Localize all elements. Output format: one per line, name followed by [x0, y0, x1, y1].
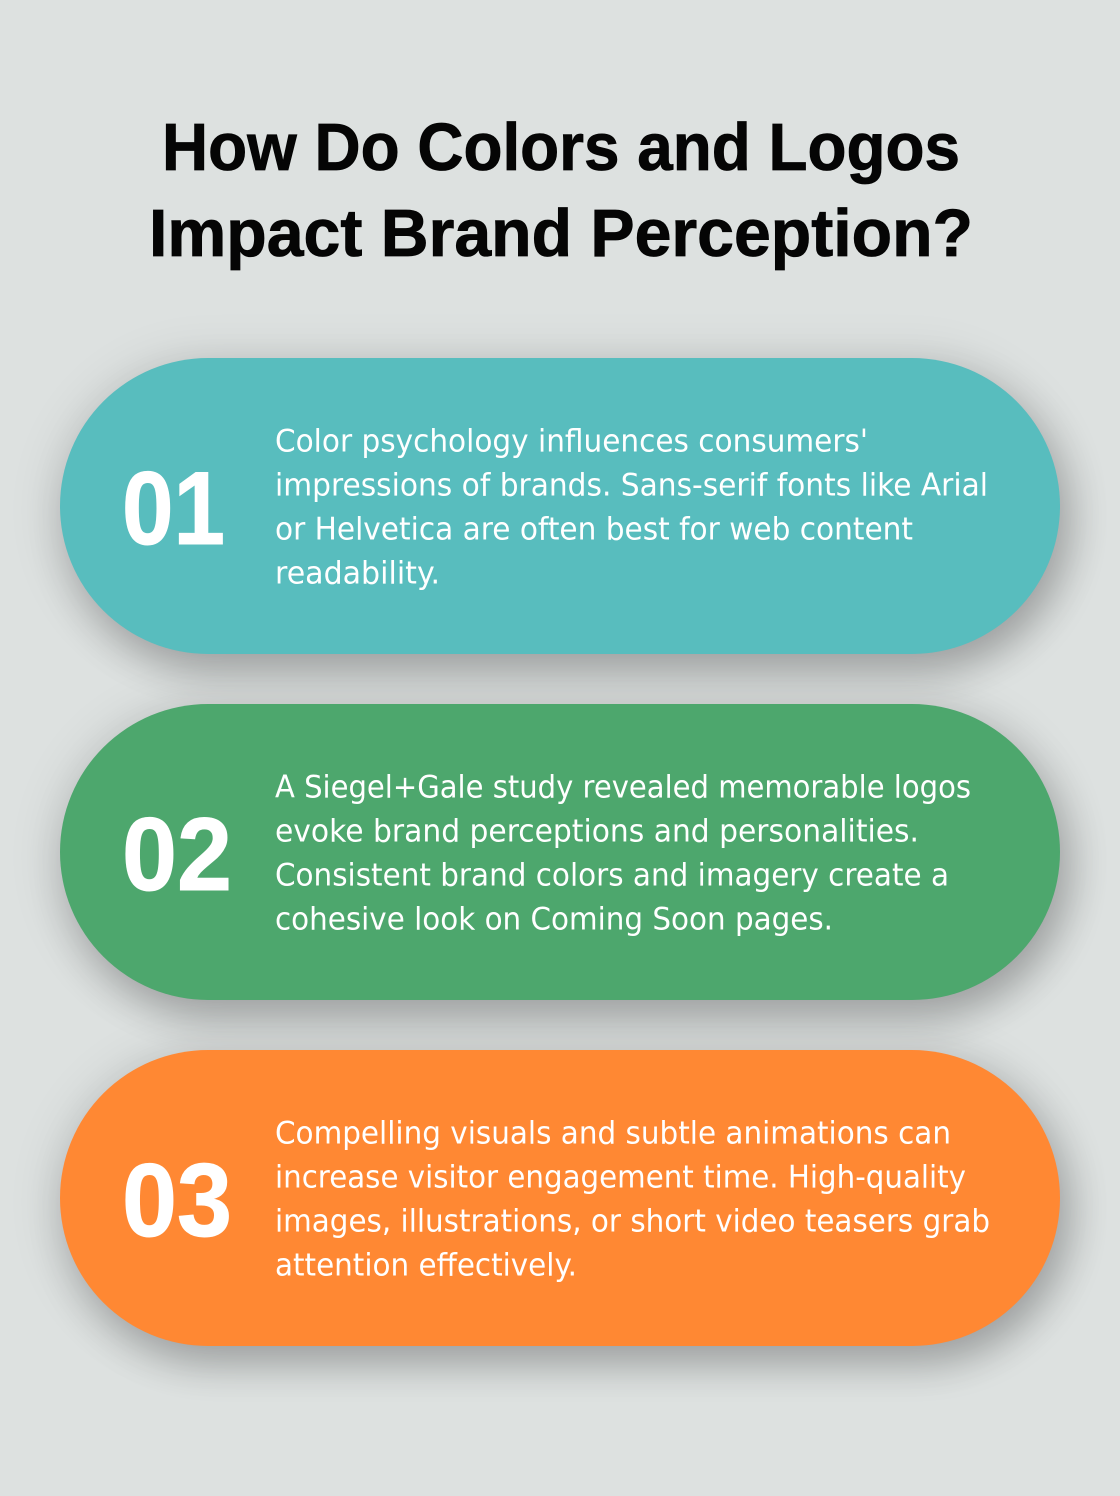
text: step 02: A Siegel+Gale study revealed memorable logos: [275, 770, 971, 806]
title: [149, 110, 973, 271]
title: Impact Brand Perception?: [149, 196, 973, 271]
text: step 02: evoke brand perceptions and personalities.: [275, 814, 919, 850]
text: step 03: attention effectively.: [275, 1248, 577, 1284]
panel: step 02: [34, 682, 1086, 1030]
text: step 01: readability.: [275, 556, 440, 592]
text: step 01: Color psychology influences consumers': [275, 424, 868, 460]
text: step 02: [275, 770, 971, 938]
text: step 01: [275, 424, 988, 592]
number 02: 02: [122, 797, 232, 913]
panel: step 03: [34, 1028, 1086, 1376]
text: step 03: Compelling visuals and subtle animations can: [275, 1116, 951, 1152]
text: step 03: [275, 1116, 990, 1284]
text: step 02: Consistent brand colors and imagery create a: [275, 858, 949, 894]
text: step 01: impressions of brands. Sans-serif fonts like Arial: [275, 468, 988, 504]
text: step 03: increase visitor engagement time. High-quality: [275, 1160, 966, 1196]
title: How Do Colors and Logos: [162, 110, 960, 185]
text: step 03: images, illustrations, or short video teasers grab: [275, 1204, 990, 1240]
panel: step 01: [34, 336, 1086, 684]
text: step 02: cohesive look on Coming Soon pages.: [275, 902, 833, 938]
number 03: 03: [122, 1143, 232, 1259]
number 01: 01: [122, 451, 225, 567]
text: step 01: or Helvetica are often best for web content: [275, 512, 913, 548]
